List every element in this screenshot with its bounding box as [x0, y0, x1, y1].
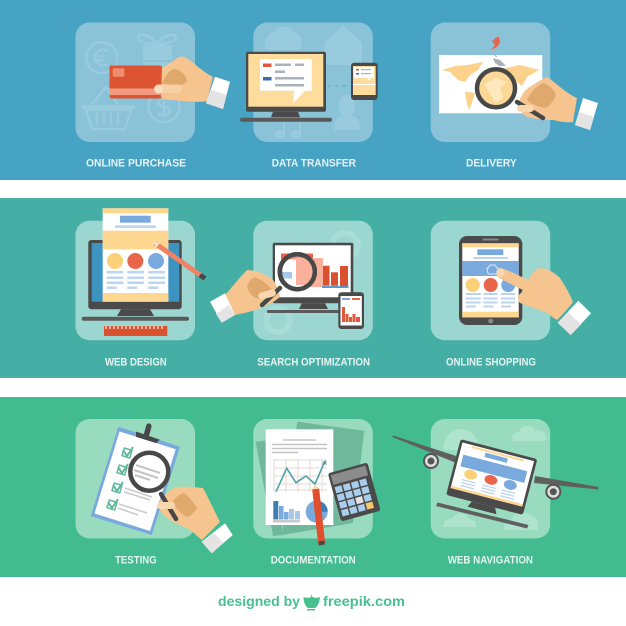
panel: web design [76, 208, 205, 340]
panel: data transfer [240, 22, 378, 142]
phone [351, 63, 378, 100]
icon: clouds [443, 426, 546, 530]
tilted monitor [445, 439, 537, 521]
panel: documentation [253, 419, 381, 545]
panel: online shopping [431, 221, 591, 340]
icon: map pin [491, 36, 506, 66]
icon: magnifier [130, 453, 168, 491]
label: search optimization: SEARCH OPTIMIZATION [257, 356, 370, 368]
icon: hand with magnifier [157, 487, 233, 553]
tablet [459, 236, 522, 325]
icon: pencil [312, 484, 322, 545]
icon: gears [266, 233, 358, 332]
footer credit [218, 593, 405, 610]
panel: delivery [431, 22, 598, 142]
label: data transfer: DATA TRANSFER [272, 157, 356, 169]
icon: hand with magnifier [517, 77, 598, 130]
engines [424, 454, 560, 499]
panel: online purchase [76, 22, 230, 142]
label: delivery: DELIVERY [466, 157, 517, 169]
icon: tablet [338, 292, 364, 329]
monitor [82, 240, 189, 321]
panel: web navigation [392, 419, 598, 538]
label: web design: WEB DESIGN [105, 356, 167, 368]
icon: dollar coin [148, 91, 180, 122]
icon: envelope [324, 25, 362, 65]
icon: basket [82, 87, 135, 129]
footer credit: designed by [218, 593, 300, 609]
monitor [240, 52, 332, 122]
icon: pointing hand [496, 268, 591, 335]
label: online purchase: ONLINE PURCHASE [86, 157, 186, 169]
map [439, 55, 542, 113]
document [266, 429, 333, 525]
label: documentation: DOCUMENTATION [271, 554, 356, 566]
bar chart [281, 254, 348, 288]
label: testing: TESTING [115, 554, 157, 566]
panel: search optimization [210, 221, 373, 340]
band: bottom row [0, 397, 626, 577]
icon: euro coin [86, 42, 117, 73]
footer credit: freepik.com [323, 593, 405, 609]
airplane wings [392, 436, 598, 490]
arrows between devices [328, 85, 346, 87]
icon: ruler [104, 326, 167, 336]
monitor base [436, 502, 528, 528]
icon: freepik logo [304, 594, 320, 610]
label: online shopping: ONLINE SHOPPING [446, 356, 536, 368]
icon: credit card [110, 66, 162, 98]
icon: cloud [265, 27, 302, 50]
icon: hand with magnifier [210, 270, 280, 323]
icon: music notes [275, 122, 301, 138]
back papers [256, 422, 364, 536]
monitor [267, 243, 353, 313]
icon: user [334, 95, 360, 130]
icon: magnifier [477, 69, 515, 107]
checklist [107, 447, 133, 510]
icon: pencil [153, 241, 205, 278]
icon: gift [138, 35, 176, 72]
band: top row [0, 0, 626, 180]
web page mockup [103, 208, 168, 302]
pie chart [306, 501, 328, 523]
small bar chart [273, 501, 300, 522]
icon: hand holding card [154, 57, 230, 109]
label: web navigation: WEB NAVIGATION [448, 554, 533, 566]
icon: calculator [328, 462, 381, 522]
panel: testing [76, 419, 233, 553]
icon: magnifier [280, 254, 315, 289]
band: middle row [0, 198, 626, 378]
speech bubble [260, 59, 312, 103]
clipboard [91, 423, 180, 535]
line chart [273, 459, 327, 492]
